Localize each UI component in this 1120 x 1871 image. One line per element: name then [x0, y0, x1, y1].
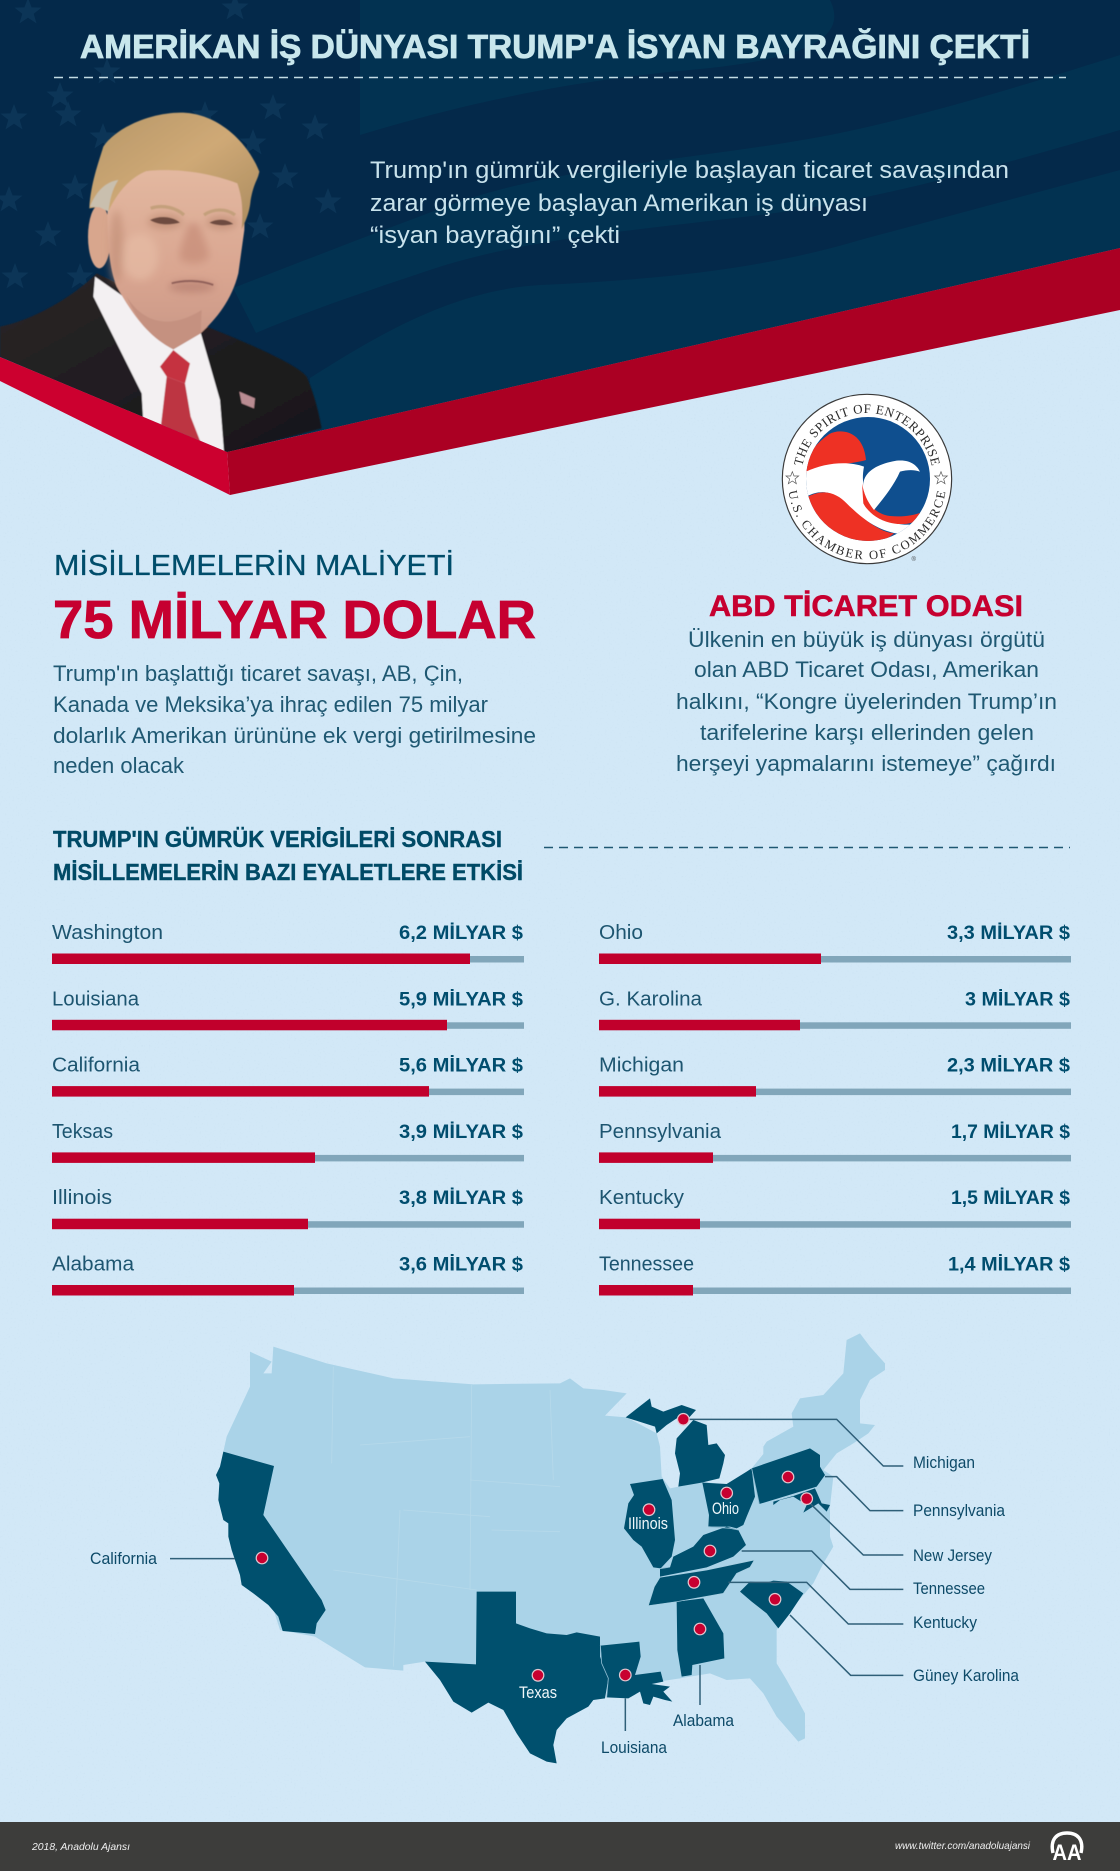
bar: Tennessee: 1,4 MİLYAR $ — [948, 1254, 1070, 1276]
intro text — [370, 157, 1009, 249]
bar: Teksas: Teksas — [52, 1121, 113, 1143]
paragraph: cost: neden olacak — [53, 753, 185, 778]
bar: Michigan: Michigan — [599, 1055, 684, 1077]
bar chart: right column — [599, 922, 1071, 1296]
panel: cost of retaliation — [53, 549, 536, 778]
paragraph: cost: dolarlık Amerikan ürününe ek vergi getirilmesine — [53, 723, 536, 748]
paragraph: cost: Trump'ın başlattığı ticaret savaşı, AB, Çin, — [53, 661, 463, 686]
map labels: New Jersey — [913, 1547, 993, 1565]
eastern states — [624, 1398, 830, 1677]
map labels: Texas — [519, 1684, 557, 1702]
state: South Carolina — [740, 1581, 803, 1628]
seal: U.S. Chamber of Commerce: ® — [911, 556, 916, 563]
bar: Michigan — [599, 1055, 1071, 1097]
footer bar — [0, 1822, 1120, 1871]
state border: Texas and Louisiana — [600, 1645, 608, 1697]
bar: Kentucky: 1,5 MİLYAR $ — [951, 1188, 1070, 1209]
bar: Ohio — [599, 922, 1071, 964]
big number: 75 MİLYAR DOLAR — [53, 590, 536, 650]
paragraph: chamber — [676, 627, 1057, 776]
bar chart: left column — [52, 922, 524, 1296]
bar: Tennessee: Tennessee — [599, 1254, 694, 1276]
bar: Illinois: Illinois — [52, 1187, 112, 1209]
bar: Washington: Washington — [52, 922, 163, 944]
bar: G. Karolina: G. Karolina — [599, 988, 703, 1010]
state: California — [216, 1452, 326, 1634]
map labels: Kentucky — [913, 1614, 978, 1632]
state: Tennessee — [648, 1560, 754, 1606]
bar: Teksas: 3,9 MİLYAR $ — [399, 1122, 523, 1143]
bar: Louisiana — [52, 988, 524, 1030]
intro text: “isyan bayrağını” çekti — [370, 222, 620, 249]
map labels: Ohio — [712, 1500, 739, 1518]
map labels — [90, 1454, 1020, 1757]
paragraph: chamber: Ülkenin en büyük iş dünyası örgütü — [688, 627, 1045, 652]
bar: California — [52, 1055, 524, 1097]
bar: California: California — [52, 1055, 141, 1077]
bar: Kentucky — [599, 1187, 1071, 1229]
paragraph: cost: Kanada ve Meksika’ya ihraç edilen 75 milyar — [53, 692, 488, 717]
bar: Alabama — [52, 1254, 524, 1296]
header banner with flag background — [0, 0, 1120, 460]
portrait of Donald Trump — [0, 113, 322, 453]
state: Pennsylvania — [752, 1448, 825, 1504]
state: Illinois — [624, 1479, 675, 1568]
bar: Alabama: 3,6 MİLYAR $ — [399, 1254, 523, 1276]
bar: Tennessee — [599, 1254, 1071, 1296]
state: Louisiana — [601, 1642, 672, 1705]
bar: Washington: 6,2 MİLYAR $ — [399, 923, 523, 944]
footer: url: www.twitter.com/anadoluajansi — [895, 1840, 1031, 1852]
map labels: Pennsylvania — [913, 1502, 1006, 1520]
title: AMERİKAN İŞ DÜNYASI TRUMP'A İSYAN BAYRAĞINI ÇEKTİ — [80, 28, 1030, 65]
bar: Pennsylvania: Pennsylvania — [599, 1121, 722, 1143]
footer: credit: 2018, Anadolu Ajansı — [31, 1841, 130, 1853]
paragraph: chamber: herşeyi yapmalarını istemeye” çağırdı — [676, 751, 1056, 776]
paragraph: chamber: olan ABD Ticaret Odası, Amerikan — [694, 657, 1039, 682]
red chevron band — [0, 248, 1120, 495]
panel: US Chamber of Commerce — [676, 590, 1057, 776]
seal: U.S. Chamber of Commerce — [782, 394, 952, 564]
bar: Alabama: Alabama — [52, 1254, 135, 1276]
paragraph: chamber: halkını, “Kongre üyelerinden Trump’ın — [676, 689, 1057, 714]
map labels: Illinois — [628, 1515, 668, 1533]
bar: Louisiana: 5,9 MİLYAR $ — [399, 989, 523, 1010]
map of the United States — [90, 1333, 1020, 1763]
bar: Pennsylvania: 1,7 MİLYAR $ — [951, 1122, 1070, 1143]
heading: chamber: ABD TİCARET ODASI — [709, 590, 1023, 623]
map markers — [256, 1414, 812, 1681]
bar: Teksas — [52, 1121, 524, 1163]
section heading: state impact — [53, 826, 1070, 885]
bar: Ohio: Ohio — [599, 922, 643, 944]
map: land base — [223, 1333, 885, 1742]
seal: U.S. Chamber of Commerce: U.S. CHAMBER OF COMMERCE — [789, 490, 946, 560]
bar: G. Karolina — [599, 988, 1071, 1030]
map labels: Michigan — [913, 1454, 975, 1472]
state: Texas — [425, 1592, 608, 1763]
bar: Washington — [52, 922, 524, 964]
callout lines — [170, 1419, 903, 1731]
bar: Ohio: 3,3 MİLYAR $ — [947, 923, 1070, 944]
bar: California: 5,6 MİLYAR $ — [399, 1056, 523, 1077]
paragraph: cost — [53, 661, 536, 778]
bar: Louisiana: Louisiana — [52, 988, 140, 1010]
intro text: Trump'ın gümrük vergileriyle başlayan ticaret savaşından — [370, 157, 1009, 184]
bar: Illinois — [52, 1187, 524, 1229]
state: Ohio — [702, 1468, 755, 1528]
bar: Pennsylvania — [599, 1121, 1071, 1163]
heading: cost of retaliation: MİSİLLEMELERİN MALİYETİ — [54, 549, 454, 582]
map labels: Louisiana — [601, 1739, 668, 1757]
state: New Jersey — [773, 1488, 830, 1513]
map labels: Tennessee — [913, 1580, 985, 1598]
bar: Kentucky: Kentucky — [599, 1187, 684, 1209]
bar: G. Karolina: 3 MİLYAR $ — [965, 989, 1070, 1010]
map labels: Güney Karolina — [913, 1667, 1020, 1685]
seal: U.S. Chamber of Commerce: THE SPIRIT OF ENTERPRISE — [794, 404, 940, 466]
intro text: zarar görmeye başlayan Amerikan iş dünyası — [370, 190, 868, 217]
bar: Illinois: 3,8 MİLYAR $ — [399, 1188, 523, 1209]
state: Michigan — [626, 1398, 725, 1487]
icon: Anadolu Agency logo: AA — [1052, 1840, 1082, 1865]
section heading: state impact: MİSİLLEMELERİN BAZI EYALETLERE ETKİSİ — [53, 859, 523, 885]
map labels: Alabama — [673, 1712, 735, 1730]
bar: Michigan: 2,3 MİLYAR $ — [947, 1056, 1070, 1077]
section heading: state impact: TRUMP'IN GÜMRÜK VERİGİLERİ SONRASI — [53, 826, 502, 852]
state: Alabama — [677, 1598, 724, 1677]
paragraph: chamber: tarifelerine karşı ellerinden gelen — [700, 720, 1034, 745]
map labels: California — [90, 1550, 158, 1568]
state: Kentucky — [660, 1527, 746, 1577]
state borders: Ohio, Kentucky, Pennsylvania — [660, 1468, 759, 1569]
